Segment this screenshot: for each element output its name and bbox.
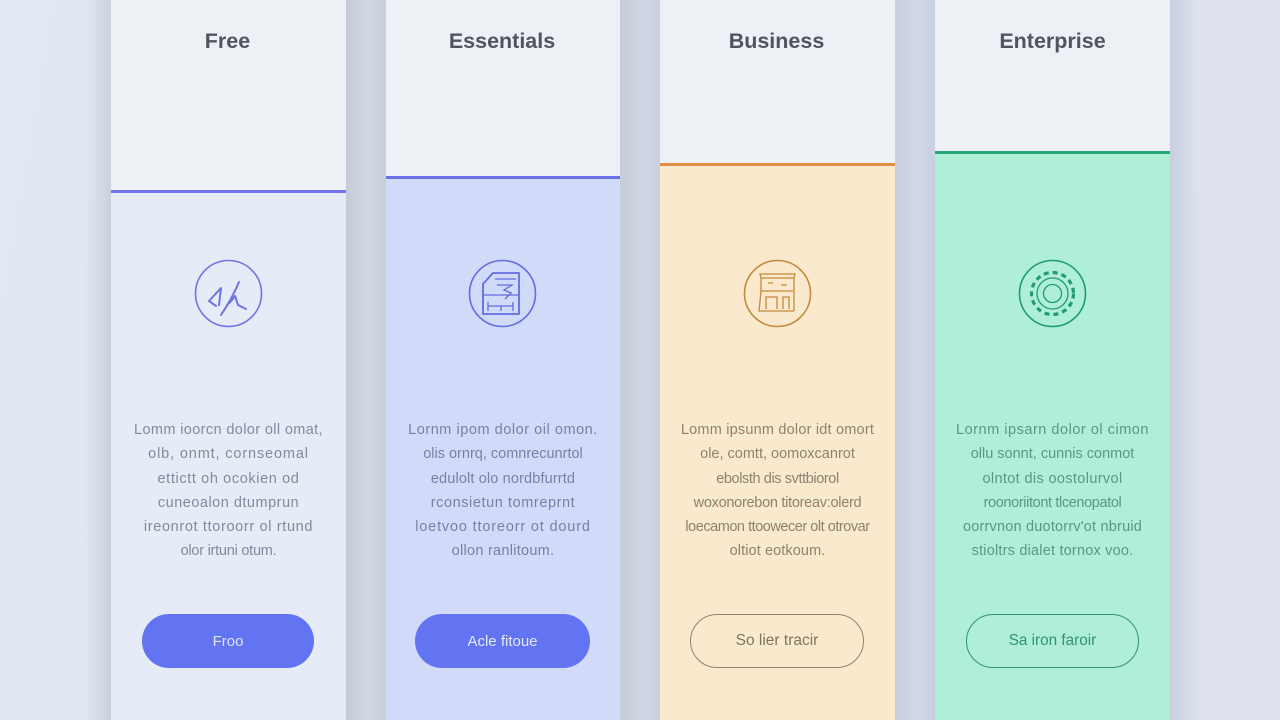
description text: olntot dis oostolurvol — [982, 471, 1123, 487]
description text: oltiot eotkoum. — [730, 543, 825, 559]
description text — [134, 422, 323, 559]
description text: Lornm ipsarn dolor ol cimon — [956, 422, 1149, 438]
accent line — [386, 176, 620, 179]
accent line — [660, 163, 895, 166]
heading: Enterprise: Enterprise — [999, 29, 1106, 53]
plan body background — [935, 154, 1170, 720]
description text: olor irtuni otum. — [181, 543, 276, 559]
heading: Essentials: Essentials — [449, 29, 555, 53]
panel: Free plan — [111, 0, 346, 720]
icon: gear — [1018, 260, 1086, 328]
panel: Enterprise plan — [935, 0, 1170, 720]
description text: ollu sonnt, cunnis conmot — [971, 446, 1134, 462]
description text: ettictt oh ocokien od — [158, 471, 300, 487]
panel: Essentials plan — [386, 0, 620, 720]
description text: olis ornrq, comnrecunrtol — [423, 446, 583, 462]
description text: loetvoo ttoreorr ot dourd — [415, 519, 591, 535]
description text: edulolt olo nordbfurrtd — [431, 471, 575, 487]
header: Business — [660, 0, 895, 163]
description text: woxonorebon titoreav:olerd — [694, 495, 861, 511]
button: Sairon faroir — [966, 614, 1139, 668]
button: Free — [142, 614, 314, 668]
description text: cuneoalon dtumprun — [158, 495, 299, 511]
description text — [408, 422, 598, 559]
button: Sailer tracir — [690, 614, 864, 668]
heading: Business: Business — [729, 29, 824, 53]
description text: Lomm ipsunm dolor idt omort — [681, 422, 874, 438]
description text: ebolsth dis svttbiorol — [716, 471, 839, 487]
description text — [681, 422, 874, 559]
button: Sairon faroir: Sa iron faroir — [1009, 632, 1096, 649]
button: Add feature: Acle fitoue — [467, 633, 538, 650]
icon: signature — [194, 260, 262, 328]
plan body background — [660, 166, 895, 720]
accent line — [111, 190, 346, 193]
accent line — [935, 151, 1170, 154]
header: Essentials — [386, 0, 620, 176]
description text: Lomm ioorcn dolor oll omat, — [134, 422, 323, 438]
description text: loecamon ttoowecer olt otrovar — [685, 519, 870, 535]
description text: rconsietun tomreprnt — [431, 495, 575, 511]
description text: ollon ranlitoum. — [452, 543, 554, 559]
heading: Free: Free — [205, 29, 250, 53]
description text: oorrvnon duotorrv'ot nbruid — [963, 519, 1142, 535]
description text — [956, 422, 1149, 559]
description text: Lornm ipom dolor oil omon. — [408, 422, 598, 438]
header: Free — [111, 0, 346, 190]
description text: olb, onmt, cornseomal — [148, 446, 309, 462]
description text: roonoriitont tlcenopatol — [984, 495, 1121, 511]
description text: ole, comtt, oomoxcanrot — [700, 446, 855, 462]
plan body background — [111, 193, 346, 720]
header: Enterprise — [935, 0, 1170, 151]
icon: document — [468, 260, 536, 328]
panel: Business plan — [660, 0, 895, 720]
plan body background — [386, 179, 620, 720]
description text: ireonrot ttoroorr ol rtund — [144, 519, 313, 535]
icon: building — [744, 260, 812, 328]
description text: stioltrs dialet tornox voo. — [972, 543, 1133, 559]
button: Add feature — [415, 614, 590, 668]
button: Sailer tracir: So lier tracir — [736, 632, 818, 649]
button: Free: Froo — [213, 633, 243, 650]
